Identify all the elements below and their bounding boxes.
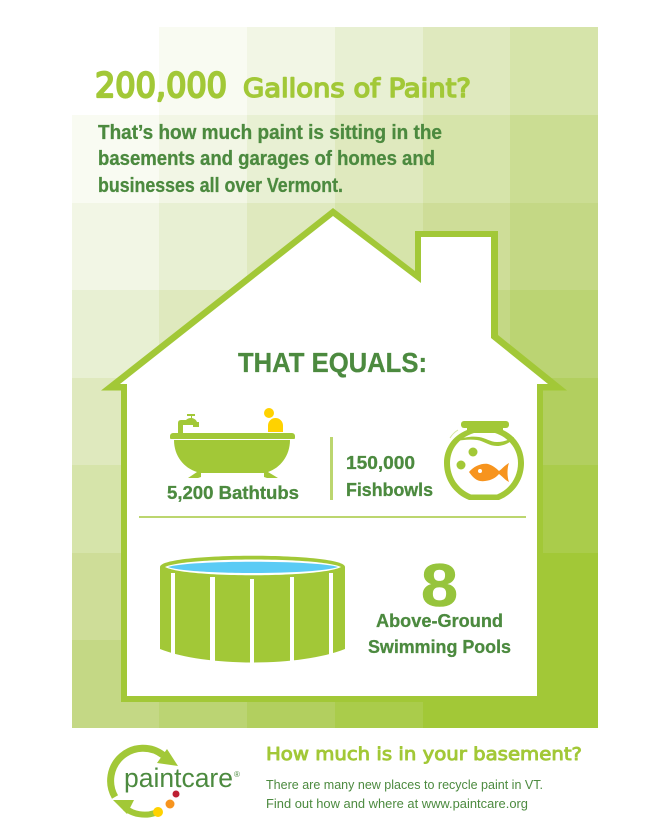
intro text: basements and garages of homes and xyxy=(98,148,435,170)
icon: bathtub xyxy=(170,408,295,478)
icon: fishbowl xyxy=(444,421,524,500)
footer text: There are many new places to recycle paint in VT. xyxy=(266,777,543,792)
label: bathtubs: 5,200 Bathtubs xyxy=(167,483,299,503)
icon: swimming pool xyxy=(160,556,345,667)
intro text xyxy=(98,122,442,197)
divider: vertical xyxy=(330,437,333,500)
house outline xyxy=(101,208,567,702)
title: 200,000 xyxy=(95,66,227,106)
logo: paintcare: paintcare xyxy=(124,763,233,793)
number: 8: 8 xyxy=(421,552,458,619)
footer text: Find out how and where at www.paintcare.org xyxy=(266,796,528,811)
heading: that equals: THAT EQUALS: xyxy=(238,347,427,378)
logo: paintcare: ® xyxy=(234,770,240,779)
logo: paintcare xyxy=(111,748,240,817)
title xyxy=(95,66,471,106)
intro text: That’s how much paint is sitting in the xyxy=(98,122,442,144)
label: fishbowls: Fishbowls xyxy=(346,480,433,500)
intro text: businesses all over Vermont. xyxy=(98,175,343,197)
label: fishbowls xyxy=(346,453,433,500)
background: graduated green tile grid xyxy=(72,27,598,728)
footer text xyxy=(266,777,543,811)
label: swimming pools: Swimming Pools xyxy=(368,637,511,657)
label: fishbowls: 150,000 xyxy=(346,453,415,473)
footer heading: How much is in your basement? xyxy=(266,744,582,765)
label: swimming pools: Above-Ground xyxy=(376,611,503,631)
divider: horizontal xyxy=(139,516,526,518)
title: Gallons of Paint? xyxy=(243,74,471,104)
label: swimming pools xyxy=(368,611,511,657)
